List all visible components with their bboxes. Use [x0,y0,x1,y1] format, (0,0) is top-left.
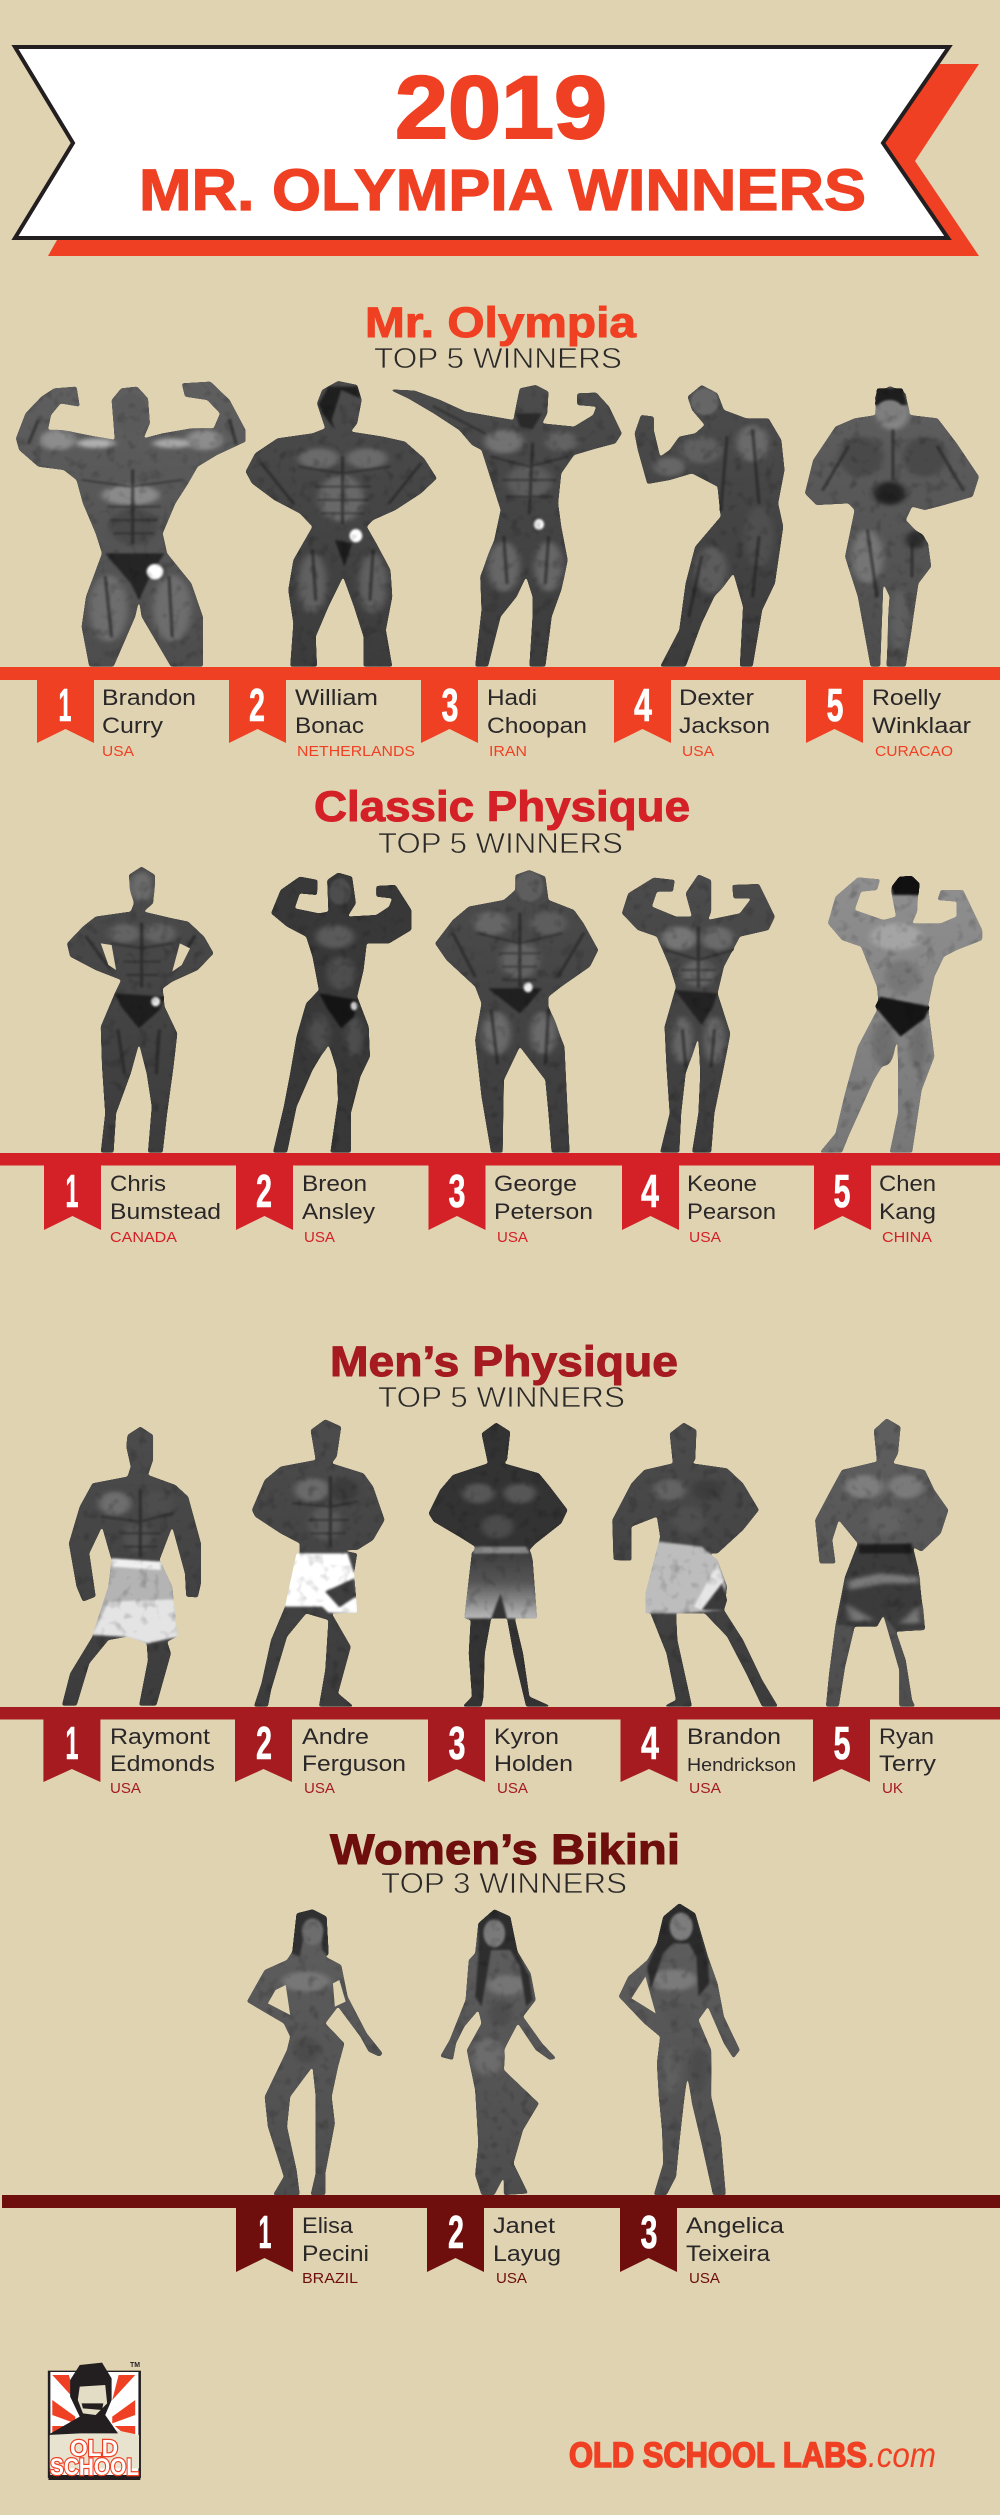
title year: 2019 [395,57,607,157]
ribbon 1 [43,1719,100,1782]
winner 1: Raymont Edmonds [43,1717,215,1797]
figure: Chen Kang [820,876,982,1153]
rank number: 5 [834,1717,850,1769]
website suffix: .com [868,2436,936,2475]
country: CURACAO [875,744,953,760]
rank number: 1 [66,1165,78,1217]
name line 1: Brandon [687,1724,781,1749]
rank number: 5 [826,679,844,731]
name line 2: Holden [494,1751,573,1776]
name line 2: Ferguson [302,1751,406,1776]
name line 2: Ansley [302,1199,375,1224]
country: USA [682,744,714,760]
ribbon 3 [421,680,478,743]
figure: Keone Pearson [622,874,775,1153]
winner 3: George Peterson [428,1165,593,1246]
name line 2: Winklaar [872,713,971,738]
country: NETHERLANDS [297,744,415,760]
country: USA [689,1781,721,1797]
winner 3: Hadi Choopan [421,679,587,760]
title banner [15,47,979,256]
figure: Dexter Jackson [635,385,784,667]
winner 4: Keone Pearson [622,1165,776,1246]
name line 2: Bonac [295,713,364,738]
country: IRAN [489,744,527,760]
ribbon 1 [44,1165,101,1230]
rank number: 1 [58,679,72,731]
ribbon 3 [620,2208,677,2272]
winner 2: Janet Layug [427,2206,561,2287]
ribbon 2 [427,2208,484,2272]
name line 1: Breon [302,1171,367,1196]
name line 2: Layug [493,2241,561,2266]
name line 1: Janet [493,2213,555,2238]
name line 1: Elisa [302,2213,354,2238]
rank number: 3 [448,1717,466,1769]
subheading: top 5 winners: TOP 5 WINNERS [374,343,622,375]
figure: George Peterson [435,870,598,1153]
name line 2: Hendrickson [687,1755,796,1775]
country: BRAZIL [302,2271,358,2287]
country: USA [497,1781,528,1797]
ribbon 2 [229,680,286,743]
figure: Breon Ansley [271,873,411,1153]
name line 2: Terry [879,1751,936,1776]
rank number: 1 [66,1717,78,1769]
winner 5: Roelly Winklaar [806,679,971,760]
winner 3: Angelica Teixeira [620,2206,785,2287]
name line 1: Roelly [872,685,941,710]
panel: Classic Physique [0,783,1000,1246]
country: USA [497,1230,528,1246]
figure: Kyron Holden [429,1423,568,1707]
figures row: Mr. Olympia athletes [16,381,979,667]
name line 2: Kang [879,1199,936,1224]
ribbon 5 [814,1165,871,1230]
rank number: 3 [448,1165,466,1217]
heading: Women's Bikini: Women’s Bikini [330,1826,680,1874]
figure: Chris Bumstead [67,867,214,1153]
name line 2: Teixeira [686,2241,771,2266]
rank number: 5 [834,1165,850,1217]
rank number: 4 [641,1717,659,1769]
country: CHINA [882,1230,932,1246]
winner 2: Breon Ansley [236,1165,375,1246]
figure: Roelly Winklaar [805,386,979,667]
name line 2: Curry [102,713,163,738]
rank number: 2 [256,1165,272,1217]
name line 1: Angelica [686,2213,785,2238]
name line 1: William [295,685,378,710]
name line 2: Peterson [494,1199,593,1224]
ribbon 4 [614,680,671,743]
figure: Elisa Pecini [247,1909,383,2195]
subheading: top 3 winners: TOP 3 WINNERS [381,1868,627,1900]
country: USA [304,1230,335,1246]
banner white ribbon [15,47,949,238]
country: UK [882,1781,903,1797]
ribbon 2 [235,1719,292,1782]
name line 1: Raymont [110,1724,210,1749]
name line 1: Dexter [679,685,754,710]
title text: MR. OLYMPIA WINNERS [139,158,866,223]
rank number: 2 [256,1717,272,1769]
figures row: Women's Bikini athletes [247,1903,740,2195]
ribbon 2 [236,1165,293,1230]
ribbon 4 [622,1165,679,1230]
panel: Mr. Olympia [0,299,1000,760]
rank number: 4 [634,679,652,731]
country: USA [304,1781,335,1797]
country: USA [496,2271,527,2287]
rank number: 3 [442,679,458,731]
name line 2: Pearson [687,1199,776,1224]
winner 5: Ryan Terry [813,1717,936,1797]
logo word: SCHOOL: SCHOOL [50,2454,139,2481]
name line 1: Chris [110,1171,166,1196]
winner 1: Elisa Pecini [236,2206,369,2287]
rank bar [2,2195,1000,2208]
winner 1: Chris Bumstead [44,1165,221,1246]
ribbon 3 [428,1719,485,1782]
figure: Angelica Teixeira [619,1903,740,2195]
rank number: 3 [640,2206,658,2258]
rank bar [0,667,1000,680]
figure: Raymont Edmonds [62,1427,201,1706]
logo artwork [48,2363,140,2480]
figure: Brandon Curry [16,382,246,667]
panel: Men's Physique [0,1338,1000,1797]
country: USA [102,744,134,760]
winner 4: Dexter Jackson [614,679,770,760]
rank bar [0,1153,1000,1166]
heading: Men's Physique: Men’s Physique [330,1338,678,1386]
rank bar [0,1707,1000,1720]
name line 1: Keone [687,1171,757,1196]
name line 1: Andre [302,1724,369,1749]
winner 2: William Bonac [229,679,415,760]
winner 3: Kyron Holden [428,1717,573,1797]
ribbon 1 [37,680,94,743]
country: USA [110,1781,141,1797]
name line 1: Hadi [487,685,537,710]
name line 2: Jackson [679,713,770,738]
name line 1: Chen [879,1171,936,1196]
panel: Women's Bikini [2,1826,1000,2287]
name line 2: Choopan [487,713,587,738]
ribbon 5 [806,680,863,743]
figure: Ryan Terry [815,1418,948,1707]
figure: Brandon Hendrickson [612,1423,778,1707]
winner 1: Brandon Curry [37,679,196,760]
heading: Mr. Olympia: Mr. Olympia [365,299,637,347]
name line 2: Edmonds [110,1751,215,1776]
figures row: Men's Physique athletes [62,1418,948,1707]
winner 4: Brandon Hendrickson [620,1717,796,1797]
rank number: 2 [249,679,265,731]
figure: Hadi Choopan [389,385,622,667]
name line 2: Pecini [302,2241,369,2266]
footer website [569,2436,936,2475]
rank number: 2 [448,2206,464,2258]
figure: Janet Layug [440,1909,556,2195]
winner 5: Chen Kang [814,1165,936,1246]
name line 1: Ryan [879,1724,934,1749]
ribbon 4 [620,1719,678,1782]
footer logo: Old School [48,2362,140,2481]
figure: Andre Ferguson [252,1419,385,1707]
name line 1: Brandon [102,685,196,710]
website name: OLD SCHOOL LABS [569,2436,867,2475]
rank number: 1 [258,2206,272,2258]
country: USA [689,2271,720,2287]
logo word: OLD: OLD [70,2435,118,2461]
rank number: 4 [641,1165,659,1217]
country: USA [689,1230,721,1246]
ribbon 1 [236,2208,293,2272]
banner shadow ribbon [48,64,979,256]
trademark: TM [130,2362,140,2369]
name line 1: George [494,1171,577,1196]
ribbon 3 [428,1165,486,1230]
subheading: top 5 winners: TOP 5 WINNERS [378,1382,625,1414]
figures row: Classic Physique athletes [67,867,982,1153]
country: CANADA [110,1230,177,1246]
subheading: top 5 winners: TOP 5 WINNERS [378,828,623,860]
heading: Classic Physique: Classic Physique [314,783,690,831]
ribbon 5 [813,1719,870,1782]
name line 1: Kyron [494,1724,559,1749]
winner 2: Andre Ferguson [235,1717,406,1797]
figure: William Bonac [246,381,437,667]
name line 2: Bumstead [110,1199,221,1224]
